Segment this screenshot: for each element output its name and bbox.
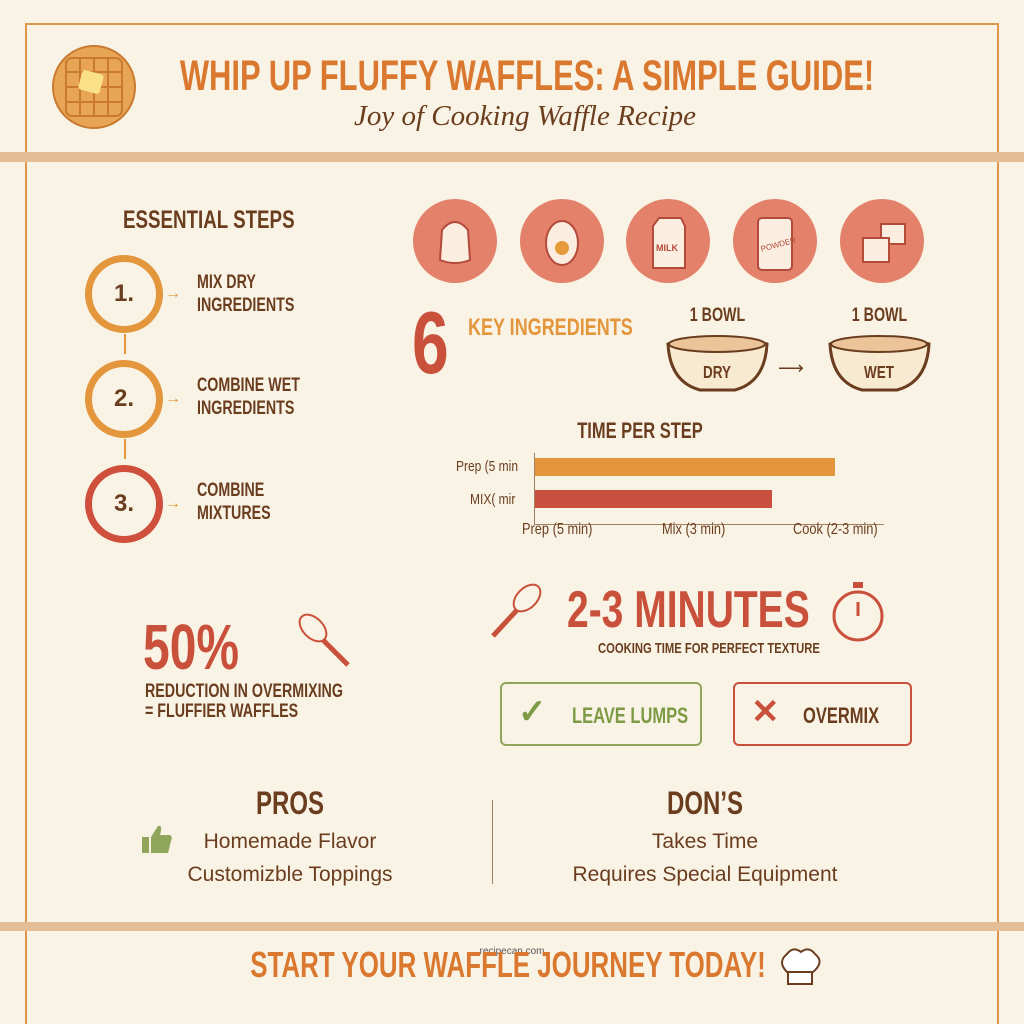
icon: chef hat [781,948,820,985]
stat: 50% [143,611,350,722]
bar chart: time per step: MIX( mir [470,491,515,508]
icon: whisk [298,614,350,667]
don't: overmix: OVERMIX [803,703,879,728]
bowl wet [828,305,931,392]
stat: cooking time [491,581,884,657]
panel: pros: Homemade Flavor [204,830,376,853]
panel: pros: PROS [256,785,324,821]
icon: flour sack [413,199,497,283]
steps [85,255,300,543]
do: leave lumps [500,682,702,746]
panel: pros: Customizble Toppings [187,863,393,886]
text: recipecan.com [479,946,545,957]
bar chart: time per step: Mix (3 min) [662,521,725,538]
step 1: 1. [114,280,134,307]
do: leave lumps: ✓ [518,693,546,731]
icon: thumbs up [142,826,172,853]
subtitle: Joy of Cooking Waffle Recipe [354,100,696,132]
don't: overmix [733,682,912,746]
icon: waffle [52,45,136,129]
stat: 6 key ingredients: 6 [412,293,449,392]
panel: don'ts: DON’S [667,785,743,821]
stat: cooking time: 2-3 MINUTES [567,581,810,639]
step 1: INGREDIENTS [197,295,294,316]
icon: can: POWDER [760,236,797,254]
icon: egg [520,199,604,283]
step 2: → [165,390,181,407]
bowls [666,305,931,392]
title: WHIP UP FLUFFY WAFFLES: A SIMPLE GUIDE! [180,52,874,100]
bar chart: time per step: Prep (5 min [456,458,518,475]
bowl dry: 1 BOWL [690,305,745,326]
step 3 [85,465,271,543]
bowl dry [666,305,769,392]
arrow: ⟶ [778,358,804,378]
step 1: → [165,285,181,302]
icon: milk [626,199,710,283]
step 3: → [165,495,181,512]
panel: don'ts: Takes Time [652,830,758,853]
stat: 50%: REDUCTION IN OVERMIXING [145,681,343,702]
step 1: MIX DRY [197,272,256,293]
icon: whisk [491,584,542,638]
bowl dry: DRY [703,363,731,383]
step 2: 2. [114,385,134,412]
don't: overmix: ✕ [751,693,780,731]
stat: 50%: 50% [143,611,239,683]
icon: milk: MILK [656,243,678,253]
bowl wet: 1 BOWL [852,305,907,326]
icon: stopwatch [832,582,884,642]
bowl wet: WET [864,363,894,383]
heading: essential steps: ESSENTIAL STEPS [123,206,295,234]
bar chart: time per step: TIME PER STEP [577,418,703,443]
step 2 [85,360,300,438]
step 1 [85,255,294,333]
ingredient icons [413,199,924,283]
step 2: COMBINE WET [197,375,300,396]
do: leave lumps: LEAVE LUMPS [572,703,688,728]
stat: 6 key ingredients: KEY INGREDIENTS [468,314,633,341]
bar chart: time per step: Prep (5 min) [522,521,592,538]
step 2: INGREDIENTS [197,398,294,419]
step 3: COMBINE [197,480,264,501]
icon: butter [840,199,924,283]
panel: don'ts [572,785,838,886]
step 3: MIXTURES [197,503,271,524]
panel: pros [142,785,393,886]
bar chart: time per step: Cook (2-3 min) [793,521,878,538]
stat: 6 key ingredients [412,293,633,392]
footer call to action: START YOUR WAFFLE JOURNEY TODAY! [250,944,766,985]
step 3: 3. [114,490,134,517]
stat: 50%: = FLUFFIER WAFFLES [145,701,298,722]
icon: can [733,199,817,283]
stat: cooking time: COOKING TIME FOR PERFECT TEXTURE [598,640,820,657]
panel: don'ts: Requires Special Equipment [572,863,837,886]
bar chart: time per step [456,418,884,538]
